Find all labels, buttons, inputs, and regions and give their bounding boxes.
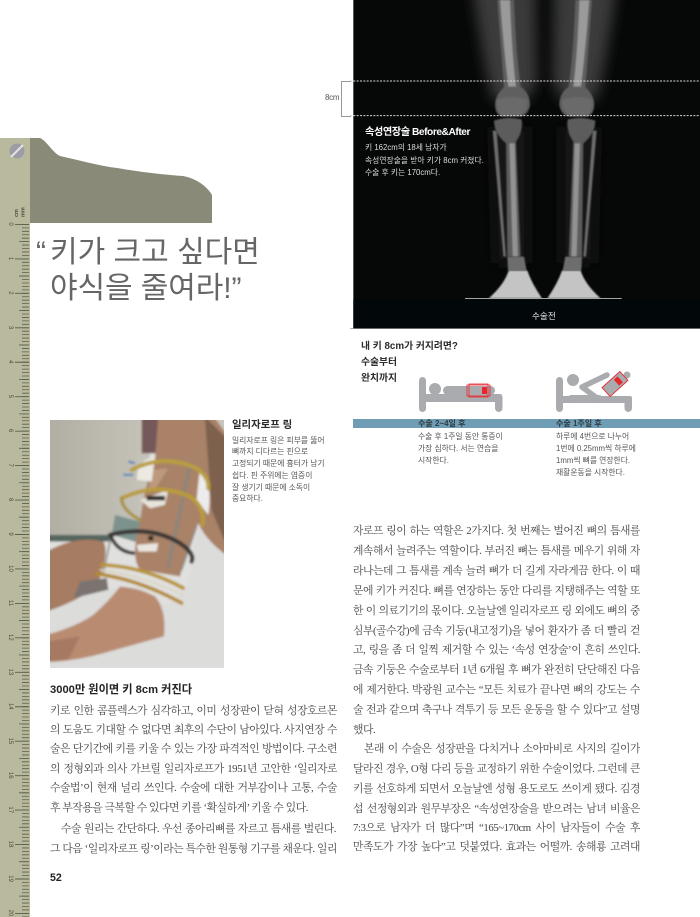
ruler numbers: 3 (7, 326, 13, 330)
body text: right column: 자로프 링이 하는 역할은 2가지다. 첫 번째는 벌어진 뼈의 틈새를 (353, 525, 640, 537)
icon: patient sitting up in bed (556, 370, 632, 412)
x-ray caption: 속성연장술을 받아 키가 8cm 커졌다. (365, 156, 484, 165)
ruler numbers: 12 (7, 634, 13, 641)
body text: right column: 계속해서 늘려주는 역할이다. 부러진 뼈는 틈새를 메우기 위해 자 (353, 545, 640, 557)
ruler header shape (30, 138, 212, 223)
timeline step 2: 재활운동을 시작한다. (556, 468, 625, 477)
ruler numbers: 14 (7, 703, 13, 710)
dashed measure lines (350, 81, 700, 116)
body text: right column: 문에 키가 커진다. 뼈를 연장하는 동안 다리를 지탱해주는 역할 또 (353, 585, 640, 597)
ruler numbers: 6 (7, 429, 13, 433)
recovery timeline heading (361, 340, 458, 384)
body text: right column: 한 이 의료기기의 몫이다. 오늘날엔 일리자로프 링 외에도 뼈의 중 (353, 605, 640, 617)
body text: left column: 수술 원리는 간단하다. 우선 종아리뼈를 자르고 틈새를 벌린다. (61, 823, 336, 835)
timeline step 2 (556, 419, 636, 477)
body text: left column: 술은 단기간에 키를 키울 수 있는 가장 파격적인 방법이다. 구소련 (50, 743, 337, 755)
timeline step 2: 1번에 0.25mm씩 하루에 (556, 444, 636, 453)
ruler numbers: 20 (7, 910, 13, 917)
ruler numbers: 2 (7, 291, 13, 295)
ruler numbers: 1 (7, 257, 13, 261)
photo caption: 일리자로프 링은 피부를 뚫어 (232, 436, 325, 445)
body text: right column: 고, 링을 좀 더 일찍 제거할 수 있는 ‘속성 연장술’이 흔히 쓰인다. (353, 644, 640, 656)
ruler unit label: cm (14, 209, 20, 217)
body text: right column: 본래 이 수술은 성장판을 다치거나 소아마비로 사지의 길이가 (364, 743, 640, 755)
body text: left column (50, 704, 337, 855)
screw icon (10, 144, 24, 158)
ruler numbers: 7 (7, 464, 13, 468)
timeline step 1: 수술 2~4일 후 (418, 419, 465, 428)
timeline step 1: 시작한다. (418, 456, 449, 465)
photo caption: 뼈까지 디다르는 핀으로 (232, 447, 308, 456)
photo caption (232, 419, 325, 503)
recovery timeline heading: 완치까지 (361, 373, 397, 384)
timeline step 2: 수술 1주일 후 (556, 419, 602, 428)
body text: left column: 수술법’이 현재 널리 쓰인다. 수술에 대한 거부감이나 고통, 수술 (50, 782, 337, 794)
recovery timeline heading: 내 키 8cm가 커지려면? (361, 341, 458, 352)
8cm bracket: 8cm (325, 93, 339, 102)
body text: left column: 후 부작용을 극복할 수 있다면 키를 ‘확실하게’ 키울 수 있다. (50, 802, 308, 814)
ruler numbers: 8 (7, 498, 13, 502)
body text: left column: 의 도움도 기대할 수 없다면 최후의 수단이 남아있다. 사지연장 수 (50, 724, 337, 736)
body text: right column: 달라진 경우, O형 다리 등을 교정하기 위한 수술이었다. 그런데 큰 (353, 763, 640, 775)
ruler ticks (22, 224, 26, 917)
timeline step 1: 가장 심하다. 서는 연습을 (418, 444, 498, 453)
body text: right column: 키를 선호하게 되면서 오늘날엔 성형 용도로도 쓰이게 됐다. 김경 (353, 783, 640, 795)
page number: 52 (50, 872, 62, 884)
title: 야식을 줄여라!” (50, 272, 241, 305)
body text: right column: 심부(골수강)에 금속 기둥(내고정기)을 넣어 환자가 좀 더 빨리 걷 (353, 625, 640, 637)
blue timeline bar (353, 419, 700, 428)
ruler unit label: mm (20, 207, 26, 217)
body text: right column: 에 제거한다. 박광원 교수는 “모든 치료가 끝나면 뼈의 강도는 수 (353, 684, 640, 696)
body text: right column: 했다. (353, 724, 375, 736)
icon: patient lying in bed (419, 377, 502, 412)
body text: right column: 7:3으로 남자가 더 많다”며 “165~170cm 사이 남자들이 수술 후 (353, 822, 640, 834)
body text: right column (353, 524, 640, 853)
title (36, 236, 260, 305)
x-ray image panel (350, 0, 700, 329)
ruler numbers: 0 (7, 222, 13, 226)
ruler numbers: 10 (7, 565, 13, 572)
ruler numbers (7, 222, 13, 917)
timeline step 2: 하루에 4번으로 나누어 (556, 432, 629, 441)
title: 키가 크고 싶다면 (50, 236, 260, 269)
x-ray caption: 속성연장술 Before&After (365, 127, 470, 138)
ruler (0, 138, 212, 917)
body text: left column: 그 다음 ‘일리자로프 링’이라는 특수한 원통형 기구를 채운다. 일리 (50, 843, 337, 855)
timeline step 2: 1mm씩 뼈를 연장한다. (556, 456, 630, 465)
photo caption: 중요하다. (232, 494, 263, 503)
ruler numbers: 11 (7, 600, 13, 607)
section heading: 3000만 원이면 키 8cm 커진다 (50, 684, 192, 696)
x-ray caption: 수술 후 키는 170cm다. (365, 168, 440, 177)
8cm bracket (325, 81, 351, 117)
photo: leg with Ilizarov ring (50, 420, 224, 668)
photo caption: 일리자로프 링 (232, 420, 292, 431)
body text: right column: 술 전과 같으며 축구나 격투기 등 모든 운동을 할 수 있다”고 설명 (353, 704, 640, 716)
photo caption: 고정되기 때문에 흉터가 남기 (232, 459, 325, 468)
body text: right column: 섭 선정형외과 원무부장은 “속성연장술을 받으려는 남녀 비율은 (353, 803, 640, 815)
x-ray label: 수술전 (532, 311, 556, 321)
body text: right column: 라나는데 그 틈새를 계속 늘려 뼈가 더 길게 자라게끔 한다. 이 때 (353, 565, 640, 577)
ruler numbers: 4 (7, 360, 13, 364)
ruler numbers: 13 (7, 669, 13, 676)
ruler numbers: 9 (7, 532, 13, 536)
ruler numbers: 17 (7, 806, 13, 814)
timeline step 1 (418, 419, 503, 465)
recovery timeline heading: 수술부터 (361, 357, 397, 368)
title: “ (36, 236, 46, 269)
x-ray caption (365, 126, 484, 177)
ruler numbers: 5 (7, 395, 13, 399)
ruler numbers: 18 (7, 841, 13, 848)
x-ray caption: 키 162cm의 18세 남자가 (365, 143, 447, 152)
ruler unit label (14, 207, 26, 217)
body text: right column: 만족도가 가장 높다”고 덧붙였다. 효과는 어떨까. 송해룡 고려대 (353, 841, 640, 853)
ruler numbers: 16 (7, 772, 13, 779)
timeline step 1: 수술 후 1주일 동안 통증이 (418, 432, 503, 441)
ruler numbers: 19 (7, 875, 13, 883)
ruler numbers: 15 (7, 737, 13, 745)
body text: left column: 키로 인한 콤플렉스가 심각하고, 이미 성장판이 닫혀 성장호르몬 (50, 705, 337, 717)
photo caption: 쉽다. 핀 주위에는 염증이 (232, 471, 312, 480)
photo caption: 잘 생기기 때문에 소독이 (232, 483, 310, 492)
body text: right column: 금속 기둥은 수술로부터 1년 6개월 후 뼈가 완전히 단단해진 다음 (353, 664, 640, 676)
